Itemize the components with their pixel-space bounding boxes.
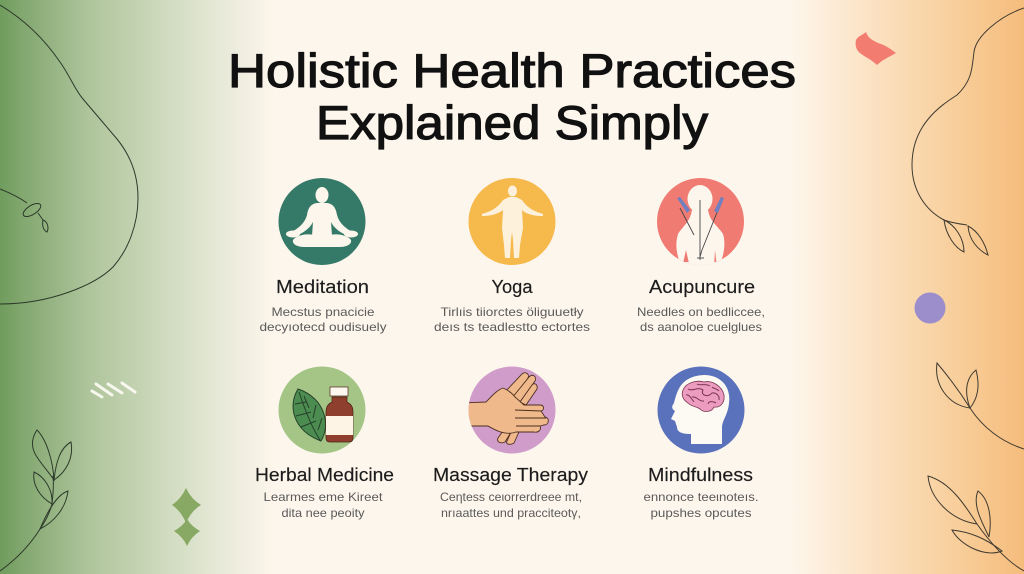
description: Mecstus pnacicie: [272, 305, 375, 319]
description: [440, 490, 582, 520]
icon: leaf and bottle: [278, 366, 366, 454]
description: deıs ts teadlestto ectortes: [434, 320, 590, 334]
left line decoration: organic curve with sprig: [0, 5, 138, 304]
heading: Mindfulness: [648, 465, 753, 485]
description: [264, 490, 383, 520]
card: Massage Therapy: [433, 366, 588, 520]
icon: brain in head: [658, 366, 744, 454]
coral shape: [856, 32, 896, 65]
description: nrıaattes und pracciteotγ,: [441, 506, 581, 520]
description: Ceηtess ceιorrerdrеее mt,: [440, 490, 582, 504]
description: decyıotecd oudisuely: [260, 320, 386, 334]
description: Needles on bedliccee,: [637, 305, 765, 319]
icon: massaging hands: [460, 366, 556, 454]
title: Explained Simply: [316, 96, 709, 149]
title: [228, 44, 796, 149]
heading: Yoga: [492, 277, 533, 297]
heading: Acupuncure: [649, 277, 755, 297]
card: Herbal Medicine: [255, 366, 394, 520]
description: dita nee peoity: [282, 506, 364, 520]
right plant upper: [937, 363, 1024, 449]
heading: Massage Therapy: [433, 465, 588, 485]
white dashes: [92, 383, 135, 397]
description: [260, 305, 386, 334]
card: Acupuncture: [637, 178, 765, 334]
right plant lower: [928, 476, 1024, 571]
description: pupshes opcutes: [650, 506, 752, 520]
icon: acupuncture needles: [657, 178, 744, 270]
green sparkle diamonds: [172, 488, 201, 546]
right line decoration: organic curve with leaves: [912, 8, 1024, 255]
heading: Herbal Medicine: [255, 465, 394, 485]
title: Holistic Health Practices: [228, 44, 796, 97]
purple dot: [914, 292, 946, 324]
description: [637, 305, 765, 334]
description: Learmes eme Kireet: [264, 490, 383, 504]
description: [644, 490, 758, 520]
description: ennonce teeιnoteıs.: [644, 490, 758, 504]
card: Yoga: [434, 178, 590, 334]
card: Meditation: [260, 178, 386, 334]
description: ds aanoloe cuelglues: [640, 320, 762, 334]
heading: Meditation: [276, 277, 369, 297]
card: Mindfulness: [644, 366, 758, 520]
left plant: [0, 430, 72, 571]
description: [434, 305, 590, 334]
icon: meditation figure: [278, 178, 366, 265]
description: Tirlıis tiiorctes öliguuetły: [440, 305, 584, 319]
icon: standing figure: [468, 178, 556, 265]
